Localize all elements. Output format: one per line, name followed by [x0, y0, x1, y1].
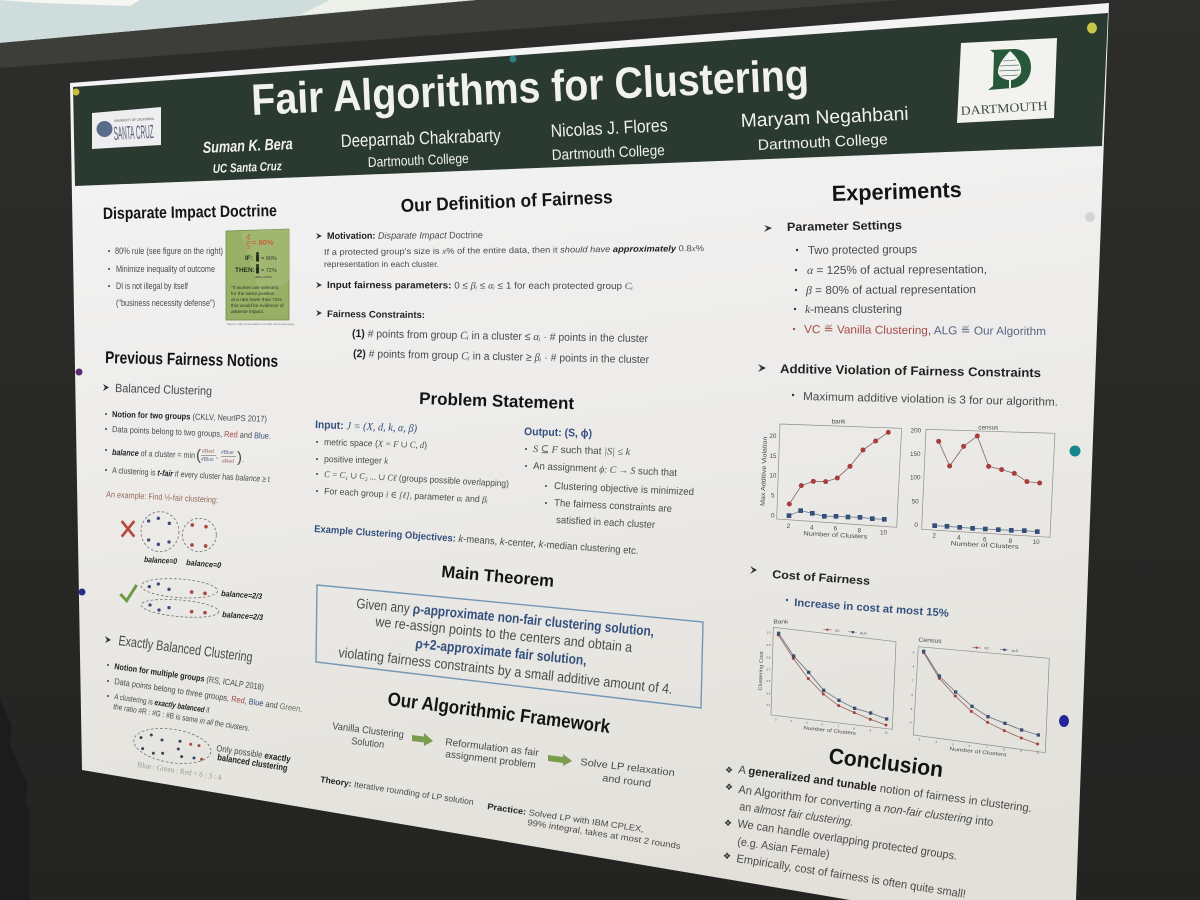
chart: census additive violation: 100 — [910, 475, 921, 482]
chart: bank clustering cost: 0.7 — [767, 667, 771, 671]
definition list: exactly balanced: the ratio #R : #G : #B is same in all the clusters. — [113, 702, 250, 733]
step: solve LP — [580, 757, 675, 790]
definition list: balanced clustering — [105, 409, 271, 484]
icon: red cross — [122, 521, 134, 537]
chart: bank additive violation: 4 — [810, 524, 814, 531]
theorem text — [338, 595, 673, 697]
balance labels: balance=0 — [144, 555, 178, 566]
figure: 80% rule green card: adverse impact. — [231, 309, 264, 314]
theorem text: we re-assign points to the centers and obtain a — [374, 613, 633, 655]
example objectives: Example Clustering Objectives: k-means, k-center, k-median clustering etc. — [314, 524, 639, 557]
figure: 80% rule green card: this would be evidence of — [231, 303, 284, 308]
bullet list: 80% rule (see figure on the right) — [115, 246, 223, 257]
figure: 80% rule green card: Source: https://www.adlitem.com/fair-and-impact-page — [227, 322, 295, 326]
conclusion bullets: We can handle overlapping protected groups. — [737, 818, 958, 863]
definition list: balanced clustering: . — [242, 457, 244, 464]
chart: census clustering cost: 7 — [986, 745, 988, 749]
heading: Problem Statement — [419, 389, 575, 413]
figure: 80% rule green card: "If women are selected — [231, 285, 279, 290]
output column: The fairness constraints are — [554, 498, 673, 515]
subheading: Cost of Fairness: Cost of Fairness — [772, 569, 870, 588]
theorem box — [316, 585, 703, 708]
chart: bank clustering cost: 4 — [790, 719, 792, 723]
panel: Our Algorithmic Framework — [320, 689, 681, 851]
diagram: exactly balanced cluster — [131, 723, 213, 769]
figure: 80% rule green card: = 90% — [261, 256, 277, 262]
subheading: Additive Violation: Additive Violation of Fairness Constraints — [780, 362, 1041, 380]
heading: Conclusion — [827, 743, 945, 782]
ratio note: Blue : Green : Red = 6 : 3 : 4 — [137, 760, 222, 782]
chart: bank additive violation: 8 — [858, 527, 862, 534]
legend: ALG — [860, 632, 867, 636]
definition list: exactly balanced: A clustering is exactly balanced if — [114, 692, 211, 715]
chart: census additive violation: 8 — [1009, 538, 1013, 545]
chart: census additive violation: 50 — [912, 499, 919, 506]
practice note: Practice: Solved LP with IBM CPLEX, — [487, 801, 644, 834]
legend — [972, 646, 1019, 653]
parameter list: β = 80% of actual representation — [805, 284, 976, 297]
subheading: Parameter Settings: Parameter Settings — [787, 218, 902, 234]
input column: For each group i ∈ [ℓ], parameter αᵢ and βᵢ — [324, 486, 489, 505]
heading: Experiments — [831, 177, 962, 206]
figure: 80% rule green card: 5 — [246, 242, 251, 251]
balance labels: balance=0 — [186, 558, 222, 570]
author: Maryam Negahbani — [740, 104, 909, 154]
chart: bank clustering cost: Number of Clusters — [803, 725, 857, 737]
chart: bank additive violation: Number of Clusters — [803, 530, 867, 541]
chart: census additive violation: 4 — [957, 534, 961, 541]
figure: 80% rule green card: = 72% — [261, 268, 277, 274]
parameter list: VC ≝ Vanilla Clustering , ALG ≝ Our Algorithm — [804, 323, 1046, 338]
caption: only possible — [216, 743, 291, 773]
definition list: balanced clustering: #Blue — [201, 457, 214, 463]
chart: census clustering cost: 5 — [952, 742, 954, 746]
icon: arrow bullet — [105, 636, 111, 643]
practice note: 99% integral, takes at most 2 rounds — [527, 817, 681, 851]
heading: Our Algorithmic Framework — [386, 689, 612, 738]
chart: census clustering cost: 9 — [1020, 749, 1022, 753]
definition list: balanced clustering: Notion for two groups (CKLV, NeurIPS 2017) — [112, 409, 267, 424]
chart: census clustering cost: 6 — [969, 744, 971, 748]
input column: positive integer k — [324, 454, 389, 466]
chart: bank clustering cost: 3 — [775, 718, 777, 722]
figure: 80% rule green card: for the same position — [231, 291, 275, 296]
chart: census additive violation: Number of Clusters — [951, 540, 1019, 551]
chart: census clustering cost: 4 — [935, 740, 937, 744]
chart: bank clustering cost: Clustering Cost — [758, 651, 765, 691]
author: Deeparnab Chakrabarty: Deeparnab Chakrabarty — [340, 125, 501, 151]
arrow — [412, 733, 433, 746]
figure: 80% rule green card: THEN: — [235, 267, 255, 274]
motivation — [316, 230, 704, 269]
figure: 80% rule green card: = 80% — [252, 238, 274, 247]
chart: bank additive violation: 0 — [771, 512, 775, 519]
push pins — [72, 22, 1097, 727]
definition list: balanced clustering: ) — [237, 449, 242, 466]
chart: census clustering cost: Number of Clusters — [949, 746, 1007, 758]
chart: bank clustering cost — [758, 619, 896, 737]
header band: SANTA CRUZ — [113, 122, 154, 145]
chart: bank additive violation: bank — [832, 419, 846, 426]
theory note: Theory: Iterative rounding of LP solution — [320, 774, 475, 807]
chart: bank additive violation: 10 — [880, 529, 888, 536]
conclusion bullets: ❖ — [724, 819, 732, 829]
legend — [823, 628, 867, 636]
parameter list: k-means clustering — [805, 304, 902, 316]
chart: census clustering cost: .9 — [912, 651, 915, 655]
panel: Previous Fairness Notions — [103, 348, 303, 782]
subheading: Balanced Clustering: Balanced Clustering — [115, 381, 212, 398]
parameter list: Two protected groups — [808, 244, 917, 257]
step: vanilla clustering: Solution — [351, 736, 385, 751]
conclusion bullets: (e.g. Asian Female) — [737, 836, 830, 861]
icon: arrow bullet — [103, 384, 109, 391]
output column — [524, 426, 694, 531]
chart: bank clustering cost: 9 — [870, 728, 872, 732]
step: reformulation — [445, 737, 540, 771]
theorem text: violating fairness constraints by a small additive amount of 4. — [338, 644, 673, 697]
practice note — [487, 801, 681, 851]
heading: Main Theorem — [441, 562, 555, 591]
chart: bank additive violation: 15 — [769, 453, 777, 460]
definition list: exactly balanced: Data points belong to three groups, Red, Blue and Green. — [114, 676, 303, 714]
input column — [315, 419, 509, 505]
chart: bank additive violation: Max Additive Violation — [760, 436, 769, 506]
figure: 80% rule green card: (80% of 90%) — [255, 275, 272, 279]
definition list: balanced clustering: #Red — [222, 459, 234, 465]
figure: 80% rule green card — [226, 229, 295, 326]
definition list: balanced clustering: balance of a cluster = min — [112, 447, 195, 460]
author: Nicolas J. Flores: Dartmouth College — [551, 142, 665, 164]
heading: Our Definition of Fairness — [400, 186, 613, 216]
chart: census additive violation: 0 — [914, 522, 918, 529]
icon: arrow bullet — [758, 364, 766, 372]
step: solve LP: Solve LP relaxation — [580, 757, 675, 779]
chart: census additive violation: 10 — [1033, 539, 1040, 546]
panel: Conclusion — [723, 743, 1033, 900]
caption: only possible: Only possible exactly — [216, 743, 291, 764]
heading: Previous Fairness Notions — [105, 348, 278, 371]
chart: census additive violation — [910, 425, 1055, 551]
chart: bank clustering cost: 0.9 — [767, 643, 771, 647]
chart: census additive violation: 150 — [910, 451, 921, 458]
fairness constraints — [316, 309, 649, 366]
output column: S ⊆ F such that |S| ≤ k — [533, 444, 631, 458]
definition list: balanced clustering: ( — [196, 447, 201, 464]
figure: 80% rule green card: IF: — [245, 255, 253, 262]
chart: census clustering cost: .8 — [912, 665, 915, 669]
parameter list: α = 125% of actual representation, — [807, 264, 987, 277]
bullet list: Minimize inequality of outcome — [116, 264, 215, 275]
chart: census clustering cost: .4 — [909, 721, 912, 725]
legend: VC — [835, 629, 840, 633]
input fairness parameters: Input fairness parameters: 0 ≤ βᵢ ≤ αᵢ ≤ 1 for each protected group Cᵢ — [327, 280, 634, 292]
arrow — [548, 754, 572, 766]
output column: satisfied in each cluster — [556, 515, 656, 531]
chart: census clustering cost: 3 — [919, 737, 921, 741]
logo: Dartmouth: DARTMOUTH — [960, 99, 1048, 118]
balance labels: balance=2/3 — [221, 589, 263, 601]
author: Suman K. Bera: UC Santa Cruz — [213, 159, 283, 176]
author: Maryam Negahbani: Maryam Negahbani — [740, 104, 909, 132]
parameter list — [793, 244, 1046, 338]
conclusion bullets: An Algorithm for converting a non-fair clustering into — [738, 784, 994, 829]
chart: census clustering cost: 10 — [1036, 751, 1040, 755]
panel: Experiments — [750, 177, 1058, 758]
chart: census additive violation: 2 — [932, 533, 936, 540]
step: vanilla clustering: Vanilla Clustering — [332, 721, 404, 741]
input column: metric space (X = F ∪ C, d) — [324, 437, 427, 450]
chart: bank additive violation: 10 — [769, 473, 777, 480]
icon: arrow bullet — [764, 225, 772, 232]
author: Maryam Negahbani: Dartmouth College — [757, 131, 888, 154]
conclusion bullets: A generalized and tunable notion of fairness in clustering. — [738, 764, 1033, 815]
background: ceiling — [0, 0, 478, 43]
output column: Clustering objective is minimized — [554, 481, 694, 498]
bullet list: ("business necessity defense") — [116, 298, 215, 309]
example caption: An example: Find ½-fair clustering: — [106, 489, 218, 505]
chart: bank clustering cost: 10 — [885, 731, 888, 735]
board top frame — [0, 0, 900, 68]
conclusion bullets — [723, 764, 1033, 900]
chart: bank clustering cost: 8 — [853, 726, 855, 730]
balance labels: balance=2/3 — [222, 610, 264, 622]
header band — [73, 13, 1108, 186]
figure: 80% rule green card: at a rate lower than 72% — [231, 297, 282, 302]
chart: census clustering cost: 8 — [1003, 747, 1005, 751]
logo: UC Santa Cruz: UNIVERSITY OF CALIFORNIA — [114, 117, 155, 123]
input column: Input: J = (X, d, k, α, β) — [315, 419, 418, 435]
chart: bank clustering cost: Bank — [773, 619, 789, 625]
author: Deeparnab Chakrabarty — [340, 125, 501, 170]
definition list: balanced clustering: A clustering is t-fair if every cluster has balance ≥ t — [112, 465, 271, 484]
bullet list — [108, 246, 223, 309]
chart: bank clustering cost: 0.8 — [767, 655, 771, 659]
definition list: balanced clustering: Data points belong to two groups, Red and Blue. — [112, 424, 271, 441]
author: Suman K. Bera — [202, 136, 293, 176]
author: Nicolas J. Flores: Nicolas J. Flores — [550, 115, 668, 141]
chart: census clustering cost: .5 — [910, 707, 913, 711]
caption: only possible: balanced clustering — [217, 752, 288, 773]
chart: census clustering cost — [909, 638, 1049, 758]
chart: bank clustering cost: 1.0 — [767, 631, 771, 635]
author: Suman K. Bera: Suman K. Bera — [202, 136, 293, 157]
chart: bank clustering cost: 0.5 — [767, 691, 771, 695]
author: Deeparnab Chakrabarty: Dartmouth College — [367, 150, 469, 170]
chart: bank additive violation — [760, 419, 902, 541]
chart: bank clustering cost: 0.4 — [767, 703, 771, 707]
subheading: Exactly Balanced Clustering: Exactly Balanced Clustering — [118, 632, 254, 665]
icon: arrow bullet — [750, 566, 757, 574]
heading: Disparate Impact Doctrine — [103, 202, 277, 223]
chart: bank clustering cost: 0.6 — [767, 679, 771, 683]
chart: bank additive violation: 2 — [787, 523, 791, 530]
motivation: Motivation: Disparate Impact Doctrine — [327, 230, 483, 242]
chart: bank clustering cost: 7 — [838, 724, 840, 728]
theorem text: ρ+2-approximate fair solution, — [415, 635, 587, 668]
step: reformulation: assignment problem — [445, 749, 536, 771]
legend: VC — [984, 647, 990, 651]
panel: Main Theorem — [316, 562, 703, 708]
logo: UC Santa Cruz — [92, 107, 161, 149]
conclusion bullets: ❖ — [725, 783, 733, 793]
bullet: increase in cost: Increase in cost at most 15% — [794, 597, 949, 620]
chart: bank clustering cost: 6 — [821, 722, 823, 726]
chart: census additive violation: census — [978, 425, 998, 432]
motivation: representation in each cluster. — [324, 259, 439, 269]
step: vanilla clustering — [332, 721, 404, 751]
panel: Problem Statement — [314, 389, 694, 557]
motivation: If a protected group's size is x% of the entire data, then it should have approximately 0.8x% — [324, 243, 704, 257]
definition list: exactly balanced: Notion for multiple groups (RS, ICALP 2018) — [114, 661, 265, 692]
author: Nicolas J. Flores — [550, 115, 668, 164]
panel: Our Definition of Fairness — [316, 186, 704, 366]
chart: census clustering cost: .7 — [911, 679, 914, 683]
legend: ALG — [1012, 649, 1019, 653]
chart: census clustering cost: Census — [918, 638, 942, 645]
figure: 80% rule green card: 4 — [246, 233, 251, 242]
output column: An assignment ϕ: C → S such that — [533, 461, 677, 479]
definition list: balanced clustering: #Red — [202, 449, 214, 455]
logo: Dartmouth — [957, 38, 1057, 123]
step: reformulation: Reformulation as fair — [445, 737, 540, 759]
person's jacket at left edge — [0, 700, 30, 900]
chart: census clustering cost: .6 — [911, 693, 913, 697]
chart: bank additive violation: 20 — [769, 433, 777, 440]
input column: C = C₁ ∪ C₂ ... ∪ Cℓ (groups possible overlapping) — [324, 469, 509, 489]
chart: census additive violation: 200 — [911, 427, 922, 434]
chart: bank additive violation: 6 — [834, 526, 838, 533]
fairness constraints: Fairness Constraints: — [327, 309, 425, 321]
definition list: balanced clustering: #Blue — [221, 450, 234, 456]
fairness constraints: (2) # points from group Cᵢ in a cluster ≥ βᵢ · # points in the cluster — [353, 348, 649, 366]
definition list: balanced clustering: , — [216, 453, 218, 460]
chart: bank additive violation: 5 — [771, 493, 775, 500]
bullet list: DI is not illegal by itself — [116, 281, 188, 292]
bullet: maximum violation: Maximum additive violation is 3 for our algorithm. — [803, 391, 1058, 409]
definition list: exactly balanced — [107, 661, 303, 733]
theorem text: Given any ρ-approximate non-fair clustering solution, — [356, 595, 655, 639]
chart: census additive violation: 6 — [983, 537, 987, 544]
conclusion bullets: ❖ — [723, 852, 731, 862]
fairness constraints: (1) # points from group Cᵢ in a cluster ≤ αᵢ · # points in the cluster — [352, 328, 648, 345]
chart: bank clustering cost: 5 — [806, 721, 808, 725]
step: solve LP: and round — [602, 773, 652, 790]
balance labels — [144, 555, 264, 622]
diagram: cluster examples — [120, 512, 220, 620]
conclusion bullets: ❖ — [725, 766, 733, 776]
panel: Disparate Impact Doctrine — [103, 202, 295, 326]
output column: Output: (S, ϕ) — [524, 426, 593, 440]
title: Fair Algorithms for Clustering — [250, 51, 810, 125]
conclusion bullets: an almost fair clustering. — [739, 801, 854, 829]
icon: green check — [120, 585, 137, 601]
